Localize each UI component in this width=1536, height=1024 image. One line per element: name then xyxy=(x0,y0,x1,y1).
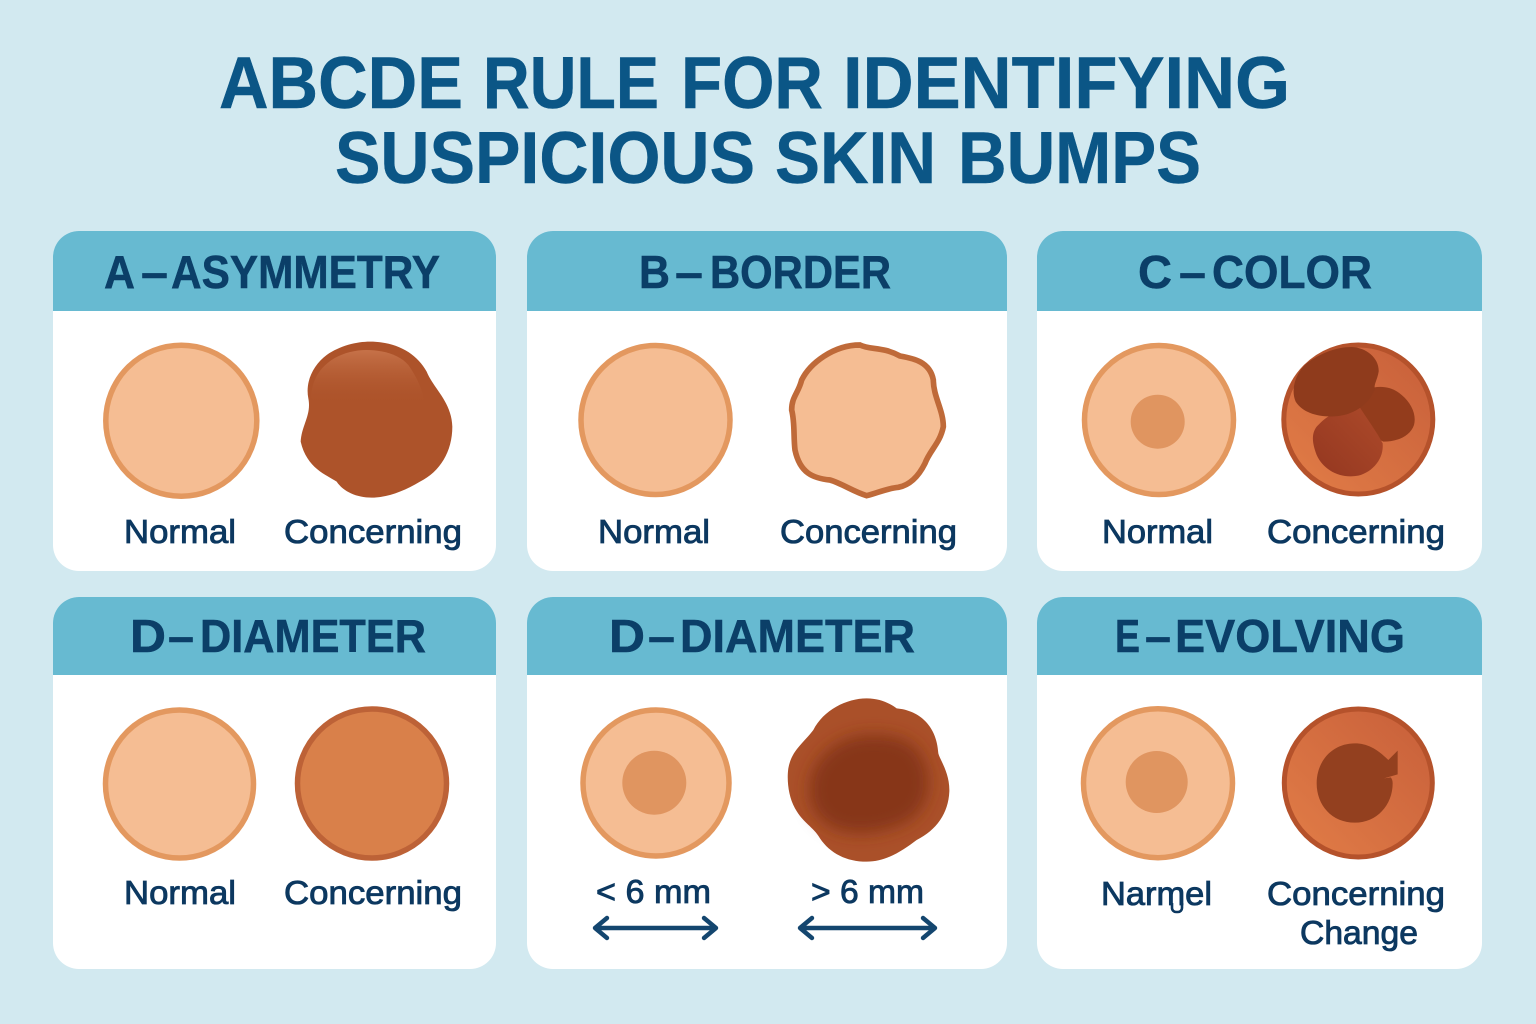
icon: normal spot with center xyxy=(1084,709,1232,858)
arrow: large width xyxy=(800,918,935,938)
label: normal (as printed): Narmel xyxy=(1101,875,1212,912)
icon: normal round spot xyxy=(106,345,257,496)
label: over 6 mm: > 6 mm xyxy=(811,873,924,910)
label: concerning change: Change xyxy=(1300,914,1418,951)
icon: asymmetric dark spot xyxy=(301,342,452,498)
heading: B border xyxy=(639,246,891,298)
heading: C color: C xyxy=(1138,246,1172,298)
heading: A asymmetry: A xyxy=(104,246,135,298)
title: ABCDE xyxy=(219,43,463,124)
heading: D diameter: DIAMETER xyxy=(200,610,426,662)
heading: D diameter: DIAMETER xyxy=(680,610,915,662)
arrow: small width xyxy=(595,918,716,938)
icon: uniform darker spot xyxy=(298,709,446,858)
heading: C color xyxy=(1138,246,1372,298)
panel: D diameter left xyxy=(53,597,496,969)
heading: D diameter: – xyxy=(648,610,675,662)
label: normal: Normal xyxy=(598,513,710,550)
label: concerning: Concerning xyxy=(284,513,462,550)
heading: D diameter: – xyxy=(168,610,194,662)
heading: A asymmetry: – xyxy=(141,246,168,298)
label: under 6 mm: < 6 mm xyxy=(596,873,711,910)
label: normal: Normal xyxy=(1102,513,1213,550)
icon: multi-colored spot xyxy=(1284,345,1433,494)
icon: evolving spot with change arrow xyxy=(1284,709,1432,857)
icon: normal spot with even center xyxy=(1084,346,1234,494)
heading: B border: BORDER xyxy=(710,246,891,298)
heading: D diameter: D xyxy=(609,610,645,662)
panel: B border xyxy=(527,231,1007,571)
label: concerning: Concerning xyxy=(780,513,957,550)
icon: normal round spot xyxy=(581,346,730,494)
icon: irregular border spot xyxy=(792,345,943,496)
icon: normal round spot xyxy=(106,710,254,858)
icon: small spot xyxy=(583,710,729,856)
heading: C color: – xyxy=(1179,246,1206,298)
label: normal: Normal xyxy=(124,513,236,550)
label: concerning change: Concerning xyxy=(1267,875,1445,912)
title: IDENTIFYING xyxy=(843,43,1290,124)
label: normal: Normal xyxy=(124,874,236,911)
label: concerning: Concerning xyxy=(1267,513,1445,550)
heading: D diameter: D xyxy=(130,610,166,662)
panel: E evolving xyxy=(1037,597,1482,969)
label: concerning: Concerning xyxy=(284,874,462,911)
icon: large dark spot xyxy=(788,698,949,862)
title: FOR xyxy=(681,43,823,124)
panel: D diameter with sizes xyxy=(527,597,1007,969)
title: RULE xyxy=(483,43,659,124)
heading: E evolving: E xyxy=(1115,610,1140,662)
heading: B border: – xyxy=(675,246,703,298)
heading: A asymmetry: ASYMMETRY xyxy=(171,246,440,298)
panel: A asymmetry xyxy=(53,231,496,571)
label: concerning change xyxy=(1267,875,1445,951)
heading: E evolving: – xyxy=(1145,610,1171,662)
title: SUSPICIOUS xyxy=(335,118,755,199)
panel: C color xyxy=(1037,231,1482,571)
title: BUMPS xyxy=(958,118,1201,199)
title xyxy=(219,43,1290,199)
heading: E evolving: EVOLVING xyxy=(1175,610,1405,662)
title: SKIN xyxy=(775,118,936,199)
heading: B border: B xyxy=(639,246,670,298)
heading: C color: COLOR xyxy=(1212,246,1372,298)
